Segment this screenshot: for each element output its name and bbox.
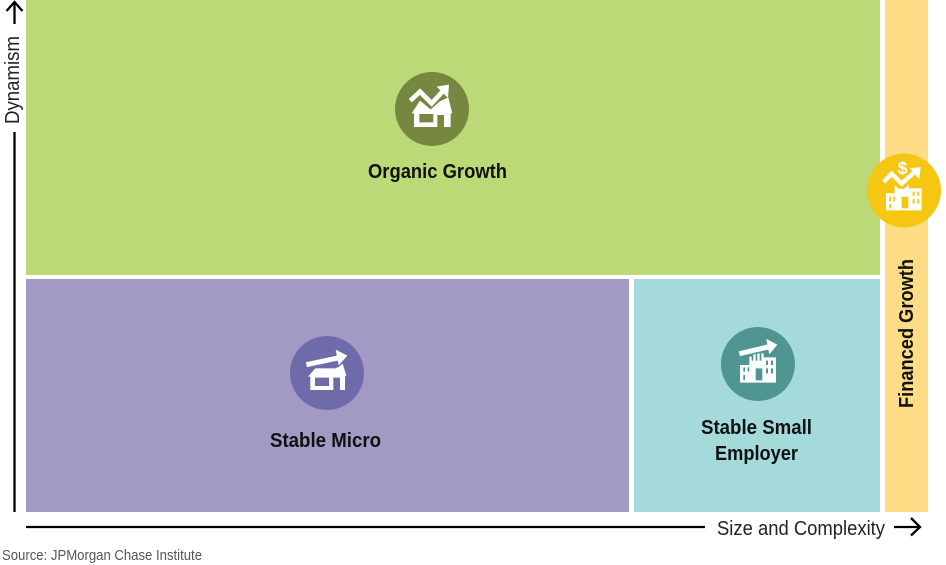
icon: organic growth house with rising line <box>395 72 469 146</box>
heading: stable small employer <box>701 417 812 465</box>
axis label: size and complexity: Size and Complexity <box>717 518 885 540</box>
icon: financed growth building with dollar and rising line: $ <box>898 158 908 178</box>
icon: stable small employer building with arrow <box>721 327 795 401</box>
axis: size and complexity arrow <box>26 518 920 536</box>
heading: stable small employer: Stable Small <box>701 417 812 439</box>
panel: organic growth <box>26 0 880 275</box>
heading: organic growth: Organic Growth <box>368 161 507 183</box>
icon: financed growth building with dollar and rising line <box>867 154 941 228</box>
axis label: dynamism: Dynamism <box>2 36 24 124</box>
panel: financed growth <box>885 0 928 512</box>
panel: stable micro <box>26 279 629 512</box>
icon: stable micro house with arrow <box>290 336 364 410</box>
heading: financed growth: Financed Growth <box>896 259 918 408</box>
panel: stable small employer <box>634 279 880 512</box>
heading: stable small employer: Employer <box>715 443 798 465</box>
source note: Source: JPMorgan Chase Institute <box>2 548 202 564</box>
heading: stable micro: Stable Micro <box>270 430 381 452</box>
axis: dynamism arrow <box>6 2 22 512</box>
